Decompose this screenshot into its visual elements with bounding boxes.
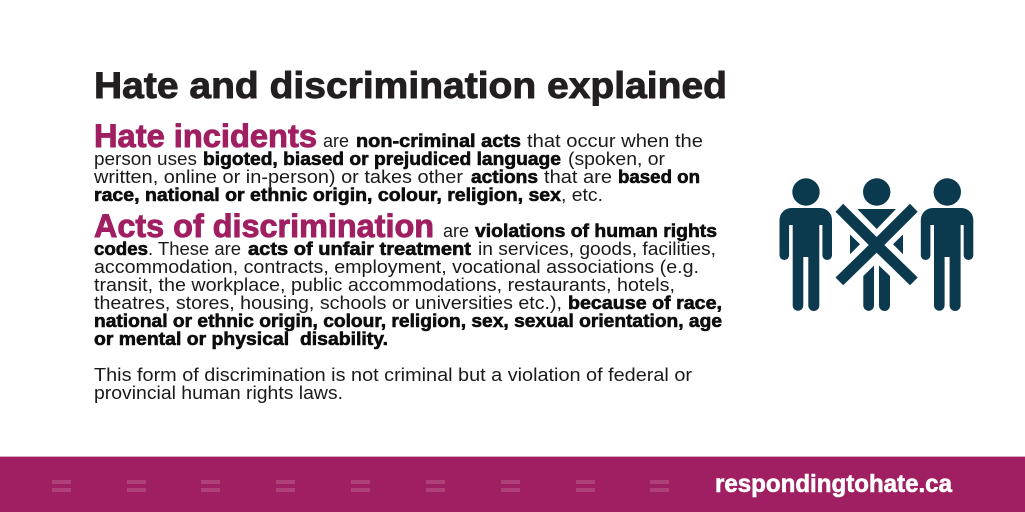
text block: legal note [94, 364, 692, 403]
text block: hate incidents: race, national or ethnic origin, colour, religion, sex [94, 184, 562, 205]
text block: acts of discrimination: acts of unfair treatment [248, 238, 471, 259]
text block: acts of discrimination: codes [94, 238, 148, 259]
text block: acts of discrimination: transit, the workplace, public accommodations, restaurants, hotels, [94, 274, 675, 295]
text block: hate incidents: , etc. [561, 184, 603, 205]
text block: hate incidents: non-criminal acts [356, 130, 521, 151]
text block: hate incidents: written, online or in-person) or takes other [93, 166, 463, 187]
text block: acts of discrimination: theatres, stores, housing, schools or universities etc.), [94, 292, 562, 313]
text block: acts of discrimination: violations of human rights [475, 220, 717, 241]
text block: hate incidents: that are [544, 166, 612, 187]
text block: hate incidents: person uses [94, 148, 197, 169]
icon: three people with crossed-out centre figure [780, 178, 973, 311]
icon: left person [780, 178, 832, 311]
footer url: respondingtohate.ca [715, 470, 953, 498]
text block: acts of discrimination [94, 208, 722, 349]
title: Hate and discrimination explained [94, 65, 727, 106]
text block: hate incidents: (spoken, or [568, 148, 665, 169]
text block: hate incidents: that occur when the [527, 130, 703, 151]
footer bar [0, 457, 1025, 512]
decorative equals marks [52, 480, 669, 492]
text block: legal note: provincial human rights laws. [94, 382, 343, 403]
icon: right person [921, 178, 973, 311]
text block: acts of discrimination: are [443, 220, 469, 241]
text block: hate incidents: based on [618, 166, 700, 187]
text block: legal note: This form of discrimination is not criminal but a violation of federal or [94, 364, 692, 385]
text block: hate incidents [93, 118, 703, 205]
text block: acts of discrimination: accommodation, contracts, employment, vocational associations (e.g. [94, 256, 699, 277]
text block: acts of discrimination: in services, goods, facilities, [478, 238, 716, 259]
text block: acts of discrimination: because of race, [568, 292, 722, 313]
heading: acts of discrimination: Acts of discrimination [94, 208, 434, 244]
text block: hate incidents: are [323, 130, 349, 151]
text block: acts of discrimination: national or ethnic origin, colour, religion, sex, sexual orientation, age [94, 310, 722, 331]
text block: acts of discrimination: or mental or physical disability. [94, 328, 388, 349]
text block: acts of discrimination: . These are [148, 238, 241, 259]
icon: centre person with X [836, 178, 918, 311]
text block: hate incidents: bigoted, biased or prejudiced language [203, 148, 561, 169]
text block: hate incidents: actions [471, 166, 538, 187]
heading: hate incidents: Hate incidents [94, 118, 317, 154]
